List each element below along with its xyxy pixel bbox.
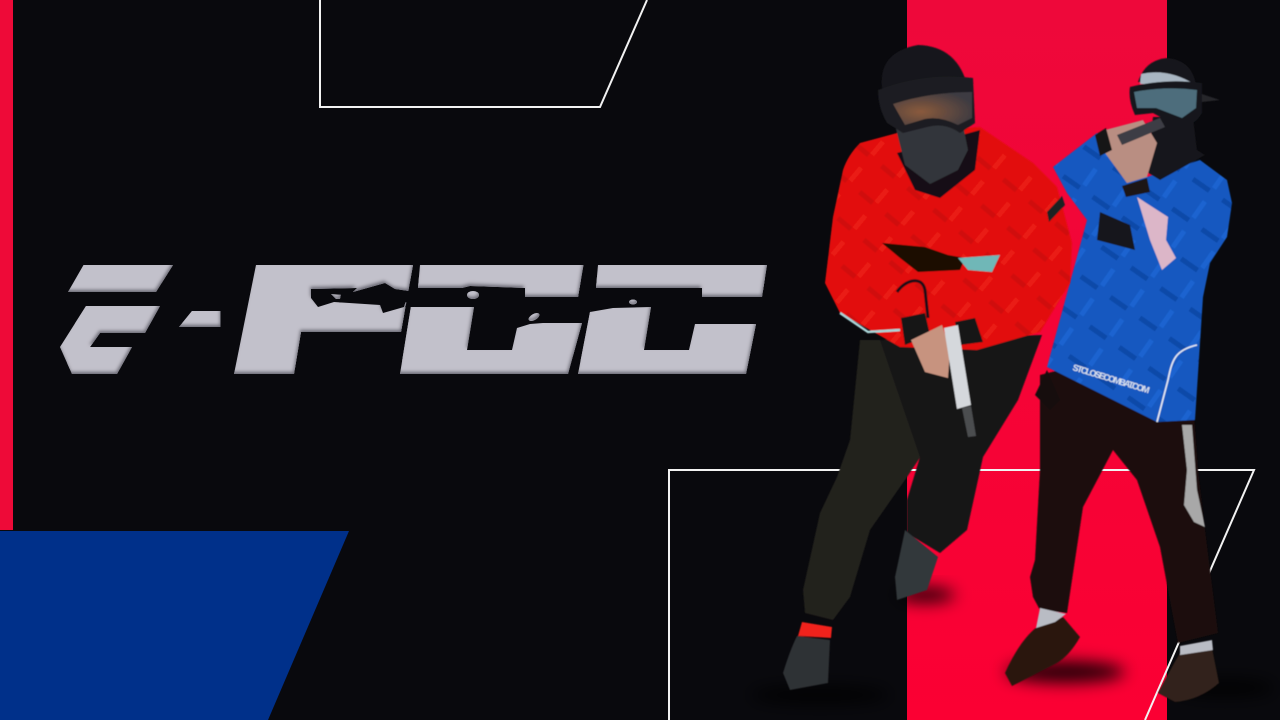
red vertical strip: [0, 0, 13, 530]
hose: [897, 281, 928, 318]
jersey hem under-layer: [1035, 370, 1060, 410]
floor shadows: [750, 587, 1275, 704]
gun body: [944, 325, 971, 409]
logo: E-FOG: O: [360, 221, 623, 417]
collar: [897, 130, 980, 198]
player in red jersey: [783, 45, 1072, 690]
mask band: [1140, 72, 1194, 84]
hands: [911, 325, 950, 378]
rear sock: [1180, 640, 1213, 655]
goggles: [878, 76, 975, 133]
chest logo: [1097, 212, 1135, 250]
gun: [1117, 118, 1165, 145]
rear leg: [803, 340, 960, 620]
lens: [1134, 88, 1197, 118]
jersey chest logo: [882, 243, 965, 272]
lower skull mask: [895, 120, 968, 184]
lens: [893, 92, 972, 125]
white outline frame bottom: [669, 470, 1254, 720]
wrist band: [1122, 178, 1150, 197]
strap: [1202, 94, 1220, 102]
collar and lower mask: [1147, 117, 1205, 180]
jersey logo teal: [958, 255, 1000, 272]
trouser side print: [1182, 425, 1205, 527]
jersey: [825, 127, 1072, 350]
cap: [882, 45, 968, 88]
player in blue jersey: [1005, 58, 1232, 702]
front shoe: [1005, 617, 1080, 686]
left wrist: [1095, 128, 1112, 156]
hand: [1103, 120, 1157, 183]
logo: E-FOG: -: [172, 218, 232, 386]
logo: E-FOG: E: [46, 233, 218, 401]
front leg: [880, 335, 1042, 553]
logo: E-FOG: G: [537, 223, 806, 418]
jersey piping: [1157, 345, 1197, 422]
red sock: [798, 622, 832, 638]
logo: E-FOG: F: [220, 233, 463, 401]
front sock: [1036, 608, 1066, 628]
white outline frame top: [320, 0, 647, 107]
sleeve stripe: [1137, 197, 1176, 270]
cap: [1138, 58, 1196, 85]
red vertical band: [907, 0, 1167, 720]
left wrist band: [901, 313, 930, 345]
jersey: [1047, 133, 1232, 422]
gun barrel: [962, 406, 976, 437]
trousers: [1030, 360, 1218, 643]
rear shoe: [783, 636, 830, 690]
rear shoe: [1158, 648, 1219, 702]
logo: E-FOG: [60, 265, 767, 374]
goggles: [1130, 81, 1202, 127]
right wrist band: [955, 318, 983, 345]
jersey url text: STCLOSECOMBAT.COM: [1071, 362, 1151, 395]
cuff stripe: [840, 313, 900, 332]
blue parallelogram: [0, 531, 349, 720]
sleeve badge: [1047, 196, 1065, 222]
front shoe: [895, 530, 938, 600]
